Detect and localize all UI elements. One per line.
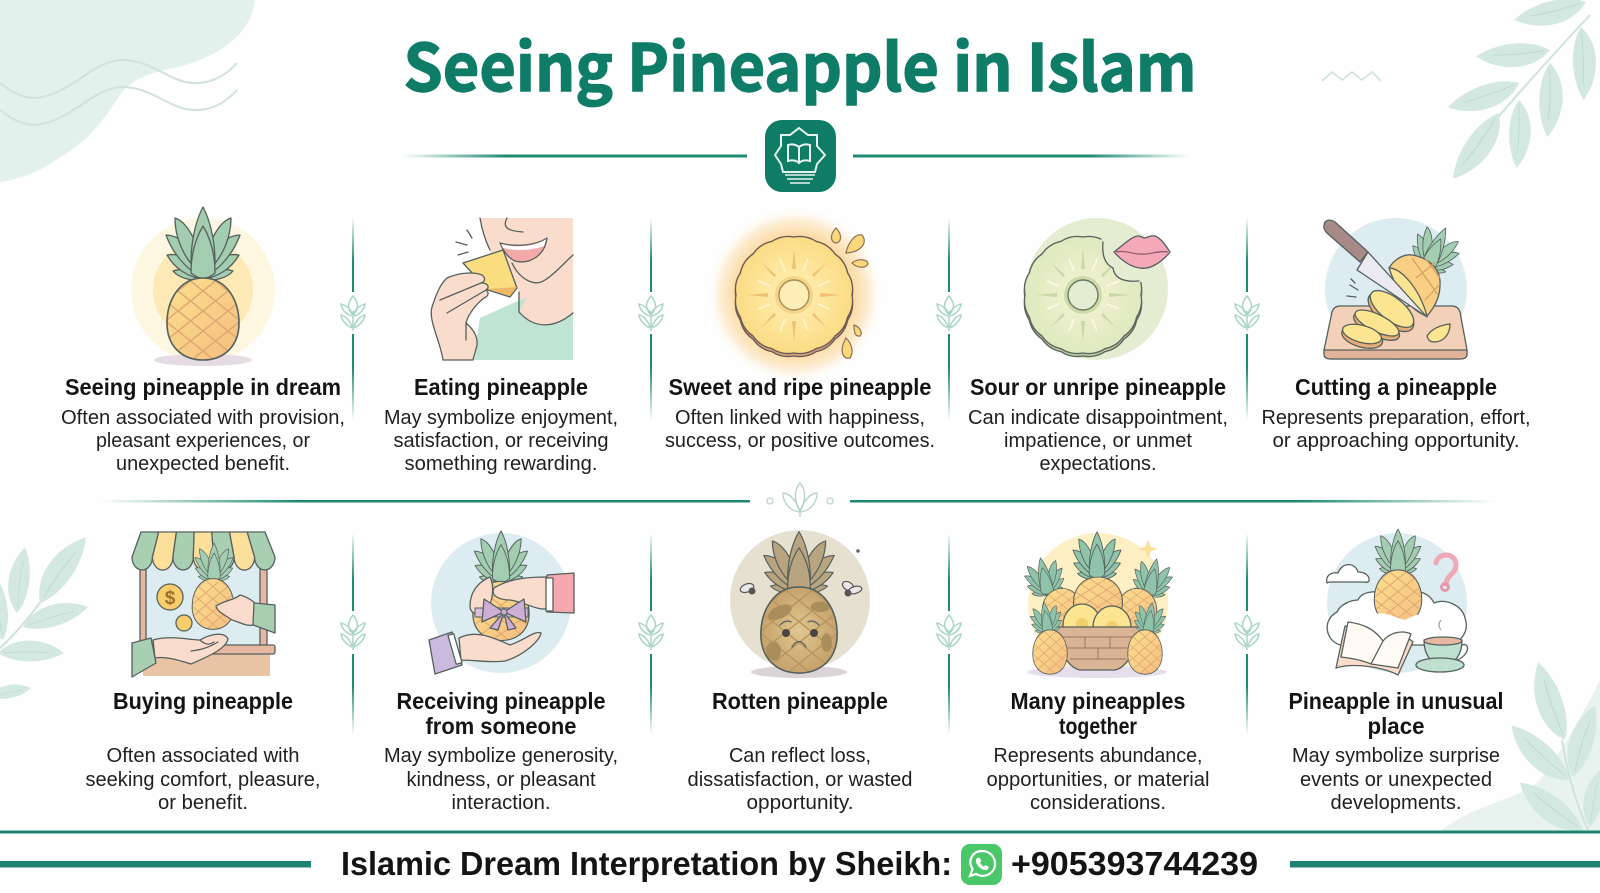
divider: column 2-3 row 1 xyxy=(639,217,663,420)
title divider with book icon xyxy=(403,120,1189,192)
description: opportunities, or material xyxy=(986,768,1210,791)
footer xyxy=(0,830,1600,885)
heading: Receiving pineapple xyxy=(396,688,606,714)
description: Can reflect loss, xyxy=(729,744,871,767)
divider: column 1-2 row 1 xyxy=(341,217,365,420)
heading: Rotten pineapple xyxy=(712,688,888,714)
icon: knife cutting pineapple on board xyxy=(1324,218,1467,360)
description xyxy=(986,744,1210,814)
row divider with sprout xyxy=(102,483,1495,517)
description: something rewarding. xyxy=(404,452,598,475)
divider: column 3-4 row 2 xyxy=(937,533,961,734)
panel: eating pineapple xyxy=(384,218,618,475)
description: or approaching opportunity. xyxy=(1272,429,1520,452)
heading: from someone xyxy=(426,713,576,739)
description xyxy=(384,744,618,814)
description xyxy=(1262,406,1530,452)
icon: glowing pineapple xyxy=(131,207,275,403)
description: impatience, or unmet xyxy=(1004,429,1192,452)
panel: rotten pineapple xyxy=(688,525,912,814)
description: considerations. xyxy=(1030,791,1166,814)
panel: cutting a pineapple xyxy=(1262,218,1530,452)
heading xyxy=(396,688,606,739)
panel: many pineapples together xyxy=(986,532,1210,814)
description: events or unexpected xyxy=(1300,768,1492,791)
description: unexpected benefit. xyxy=(116,452,290,475)
description: May symbolize enjoyment, xyxy=(384,406,618,429)
description: interaction. xyxy=(452,791,550,814)
description: developments. xyxy=(1330,791,1462,814)
description: Represents preparation, effort, xyxy=(1262,406,1530,429)
description xyxy=(61,406,345,475)
description xyxy=(968,406,1228,475)
icon: person eating pineapple xyxy=(431,218,573,360)
icon: basket of pineapples xyxy=(1022,532,1175,697)
divider: column 2-3 row 2 xyxy=(639,533,663,734)
title: Seeing Pineapple in Islam xyxy=(404,16,1196,110)
description: Often associated with provision, xyxy=(61,406,345,429)
description: Often associated with xyxy=(106,744,300,767)
divider: column 4-5 row 1 xyxy=(1235,217,1259,420)
description: Can indicate disappointment, xyxy=(968,406,1228,429)
heading xyxy=(1010,688,1186,739)
decoration: top-left blob and waves xyxy=(0,0,255,182)
heading: Sweet and ripe pineapple xyxy=(668,374,932,400)
description: satisfaction, or receiving xyxy=(394,429,608,452)
description: Represents abundance, xyxy=(994,744,1202,767)
panel: sour or unripe pineapple xyxy=(968,218,1228,475)
icon: market stall xyxy=(132,532,275,677)
decoration: left leaves xyxy=(0,529,94,702)
divider: column 1-2 row 2 xyxy=(341,533,365,734)
heading: together xyxy=(1059,713,1137,739)
heading xyxy=(1288,688,1504,739)
icon: star and open book xyxy=(765,120,836,192)
panel: pineapple in unusual place xyxy=(1288,529,1504,814)
description xyxy=(86,744,320,814)
description xyxy=(688,744,912,814)
decoration: bottom-right leaves xyxy=(1440,659,1600,842)
description xyxy=(1292,744,1500,814)
heading: Pineapple in unusual xyxy=(1288,688,1504,714)
icon: whatsapp xyxy=(961,844,1002,885)
icon: hands gifting pineapple xyxy=(429,531,574,674)
heading: Sour or unripe pineapple xyxy=(970,374,1226,400)
icon: bitten unripe slice and lips xyxy=(1024,218,1170,360)
panel: sweet and ripe pineapple xyxy=(665,207,935,452)
icon: rotten pineapple with flies xyxy=(730,530,870,678)
description: or benefit. xyxy=(158,791,248,814)
description: success, or positive outcomes. xyxy=(665,429,935,452)
description: Often linked with happiness, xyxy=(675,406,925,429)
footer text: Islamic Dream Interpretation by Sheikh: xyxy=(341,845,952,882)
description: dissatisfaction, or wasted xyxy=(688,768,912,791)
description: pleasant experiences, or xyxy=(96,429,310,452)
heading: Many pineapples xyxy=(1010,688,1186,714)
description: opportunity. xyxy=(746,791,854,814)
description: seeking comfort, pleasure, xyxy=(86,768,320,791)
heading: Buying pineapple xyxy=(113,688,293,714)
icon: ripe pineapple slice with juice xyxy=(707,207,883,383)
panel: receiving pineapple from someone xyxy=(384,531,618,814)
phone number: +905393744239 xyxy=(1011,845,1258,882)
description: kindness, or pleasant xyxy=(406,768,596,791)
icon: market stall: $ xyxy=(165,588,176,609)
panel: seeing pineapple in dream xyxy=(61,207,345,475)
divider: column 4-5 row 2 xyxy=(1235,533,1259,734)
icon: pineapple on cloud with book and cup xyxy=(1327,529,1467,675)
description: May symbolize generosity, xyxy=(384,744,618,767)
description xyxy=(665,406,935,452)
description: May symbolize surprise xyxy=(1292,744,1500,767)
heading: Cutting a pineapple xyxy=(1295,374,1497,400)
description: expectations. xyxy=(1040,452,1156,475)
heading: place xyxy=(1368,713,1424,739)
heading: Eating pineapple xyxy=(414,374,588,400)
panel: buying pineapple xyxy=(86,532,320,814)
heading: Seeing pineapple in dream xyxy=(65,374,341,400)
decoration: top-right leaves xyxy=(1322,0,1597,187)
divider: column 3-4 row 1 xyxy=(937,217,961,420)
description xyxy=(384,406,618,475)
